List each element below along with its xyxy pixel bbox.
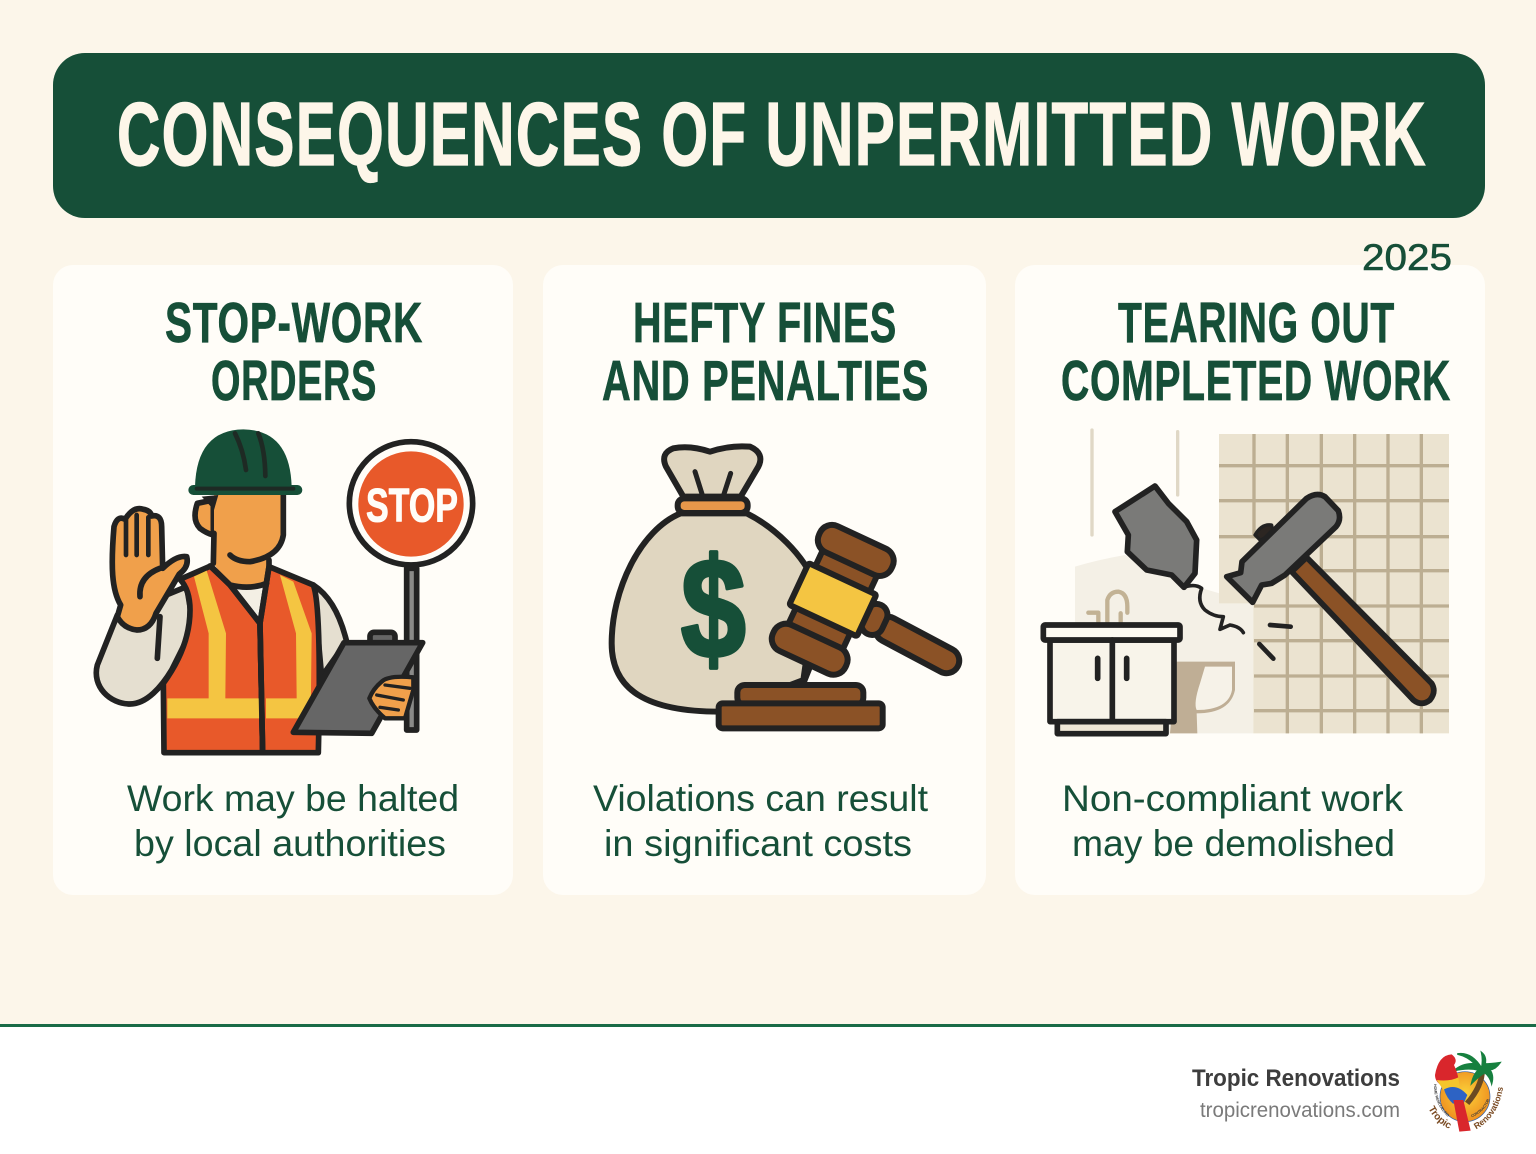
text: fines description: Violations can result <box>593 778 929 819</box>
panel: tearing out completed work <box>1015 265 1485 895</box>
text: tearing out description: Non-compliant work <box>1062 778 1404 819</box>
icon: worker with stop sign <box>96 429 473 753</box>
panel: stop-work orders <box>53 265 513 895</box>
heading: stop-work orders <box>165 291 423 413</box>
text: fines description <box>593 778 929 864</box>
text: stop-work description: Work may be halted <box>127 778 459 819</box>
text: tearing out description <box>1062 778 1404 864</box>
heading: tearing out <box>1061 291 1451 413</box>
text: stop-work description: by local authorities <box>134 823 446 864</box>
logo: tropic renovations parrot: Renovations <box>1474 1087 1503 1130</box>
logo: tropic renovations parrot: HOME REMODELING <box>1434 1084 1450 1116</box>
icon: hammer breaking tile wall <box>1043 430 1449 734</box>
icon: worker with stop sign: STOP <box>366 479 458 532</box>
heading: hefty fines: HEFTY FINES <box>633 291 897 355</box>
footer website: tropicrenovations.com <box>1200 1099 1400 1122</box>
heading: hefty fines <box>602 291 929 413</box>
year label: 2025 <box>1362 237 1452 278</box>
icon: money bag and gavel: $ <box>681 530 746 688</box>
heading: tearing out: TEARING OUT <box>1118 291 1395 355</box>
text: stop-work description <box>127 778 459 864</box>
footer <box>0 1024 1536 1154</box>
heading: hefty fines: AND PENALTIES <box>602 349 929 413</box>
logo: tropic renovations parrot: Tropic <box>1430 1105 1451 1128</box>
panel: hefty fines and penalties <box>543 265 991 895</box>
text: tearing out description: may be demolished <box>1072 823 1395 864</box>
heading: stop-work orders: ORDERS <box>211 349 377 413</box>
heading: stop-work orders: STOP-WORK <box>165 291 423 355</box>
text: fines description: in significant costs <box>604 823 912 864</box>
logo: tropic renovations parrot: CONTRACTOR <box>1471 1099 1490 1117</box>
logo: tropic renovations parrot <box>1430 1050 1503 1132</box>
icon: money bag and gavel <box>612 446 991 728</box>
footer brand name: Tropic Renovations <box>1192 1065 1400 1092</box>
title banner <box>53 53 1485 218</box>
